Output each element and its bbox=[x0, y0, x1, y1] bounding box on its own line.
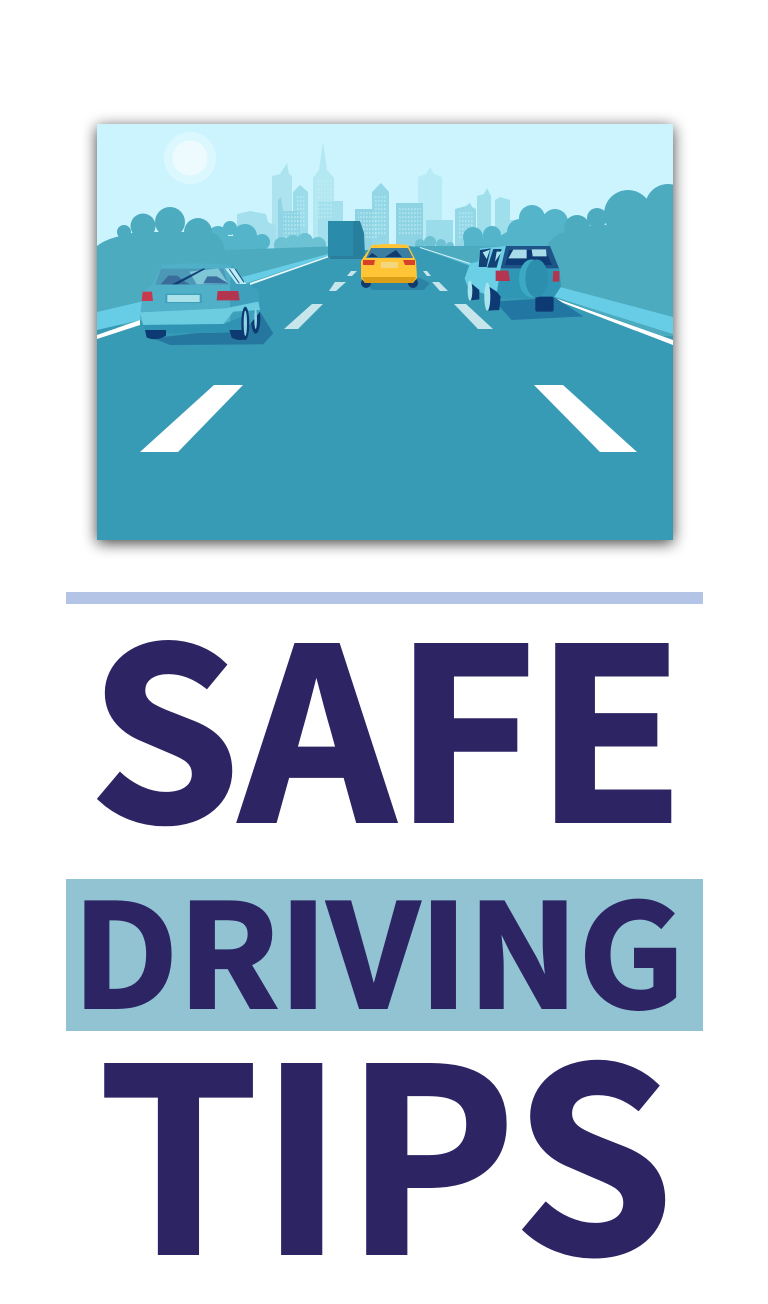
sky bbox=[97, 124, 673, 249]
truck bbox=[328, 221, 365, 259]
sun bbox=[164, 132, 216, 184]
divider bar bbox=[66, 592, 703, 604]
left trees bbox=[97, 207, 340, 325]
title word: SAFE: SAFE bbox=[90, 546, 684, 890]
distant tree line bbox=[274, 233, 454, 248]
blue sedan bbox=[140, 263, 273, 345]
illustration: highway scene bbox=[97, 124, 673, 452]
right trees bbox=[415, 184, 691, 336]
title band: DRIVING: DRIVING bbox=[72, 844, 684, 1050]
lane dashes bbox=[140, 271, 637, 452]
road bbox=[140, 246, 654, 336]
right sidewalk and edge line bbox=[420, 247, 673, 345]
back tree line bbox=[208, 205, 575, 250]
city skyline bbox=[237, 142, 518, 250]
illustration frame with drop shadow bbox=[97, 124, 673, 540]
left sidewalk and edge line bbox=[97, 254, 328, 339]
teal SUV bbox=[465, 246, 583, 320]
yellow taxi bbox=[361, 244, 430, 290]
